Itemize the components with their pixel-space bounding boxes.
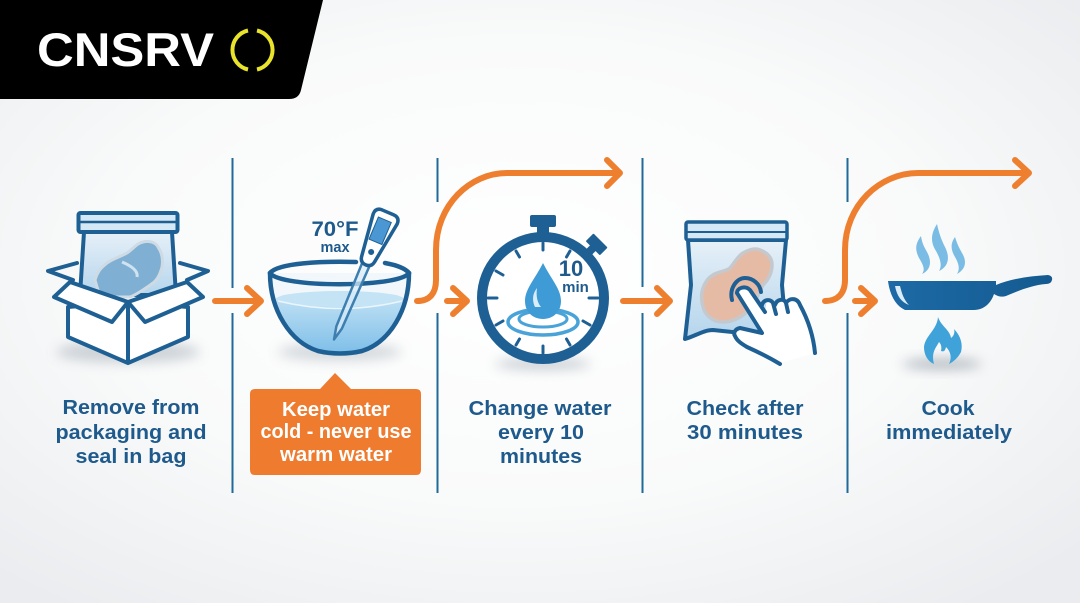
hand xyxy=(734,287,815,363)
back flaps xyxy=(48,263,208,280)
arrow: step 1 to 2 xyxy=(215,288,261,314)
caption: step 3: Change water xyxy=(468,397,612,420)
box xyxy=(68,302,188,363)
icon: stopwatch with water drop: min xyxy=(562,279,589,296)
caption: step 5 xyxy=(886,397,1013,444)
curved arrow: step 4 to 5 xyxy=(825,160,1029,301)
caption: step 4 xyxy=(686,397,804,444)
callout: keep water cold: warm water xyxy=(279,443,392,466)
caption: step 4: Check after xyxy=(686,397,804,420)
caption: step 1: seal in bag xyxy=(76,445,186,468)
caption: step 1: Remove from xyxy=(62,396,200,419)
bowl body xyxy=(270,273,409,354)
arrow: step 3 to 4 xyxy=(623,288,670,314)
caption: step 3: minutes xyxy=(500,445,582,468)
caption: step 3 xyxy=(468,397,612,468)
flame xyxy=(924,317,962,364)
icon: bowl of water with thermometer: max xyxy=(320,240,350,256)
tick marks xyxy=(488,243,598,353)
icon: stopwatch with water drop xyxy=(482,215,608,370)
label: 70F max: 70°F xyxy=(312,218,359,241)
arrow: into step 3 xyxy=(447,288,467,314)
pan xyxy=(888,275,1052,310)
bowl rim and wall xyxy=(270,273,409,354)
caption: step 5: Cook xyxy=(922,397,975,420)
logo banner xyxy=(0,0,323,99)
thermometer xyxy=(322,207,400,345)
caption: step 5: immediately xyxy=(886,421,1013,444)
caption: step 4: 30 minutes xyxy=(687,421,803,444)
caption: step 1: packaging and xyxy=(56,421,206,444)
callout: keep water cold: Keep water xyxy=(282,398,390,421)
callout: keep water cold xyxy=(250,373,421,475)
icon: bag in open box xyxy=(48,213,208,363)
step dividers xyxy=(232,158,848,493)
callout: keep water cold: cold - never use xyxy=(260,420,412,443)
caption: step 3: every 10 xyxy=(498,421,584,444)
icon: bag with thawing meat and pressing hand xyxy=(685,222,815,364)
meat xyxy=(702,249,772,322)
water xyxy=(276,298,404,352)
label: 10 min: 10 xyxy=(559,256,583,281)
caption: step 1 xyxy=(56,396,206,468)
logo wordmark: CNSRV xyxy=(37,23,215,76)
water drop xyxy=(525,263,561,319)
steam xyxy=(916,224,965,274)
arrow: into step 5 xyxy=(855,288,875,314)
icon: bowl of water with thermometer xyxy=(270,207,409,361)
curved arrow: step 2 to 3 xyxy=(417,160,620,301)
icon: frying pan on flame xyxy=(888,224,1052,369)
sealed bag with frozen meat xyxy=(78,213,178,297)
ripples xyxy=(508,309,578,335)
logo brackets xyxy=(232,30,273,70)
